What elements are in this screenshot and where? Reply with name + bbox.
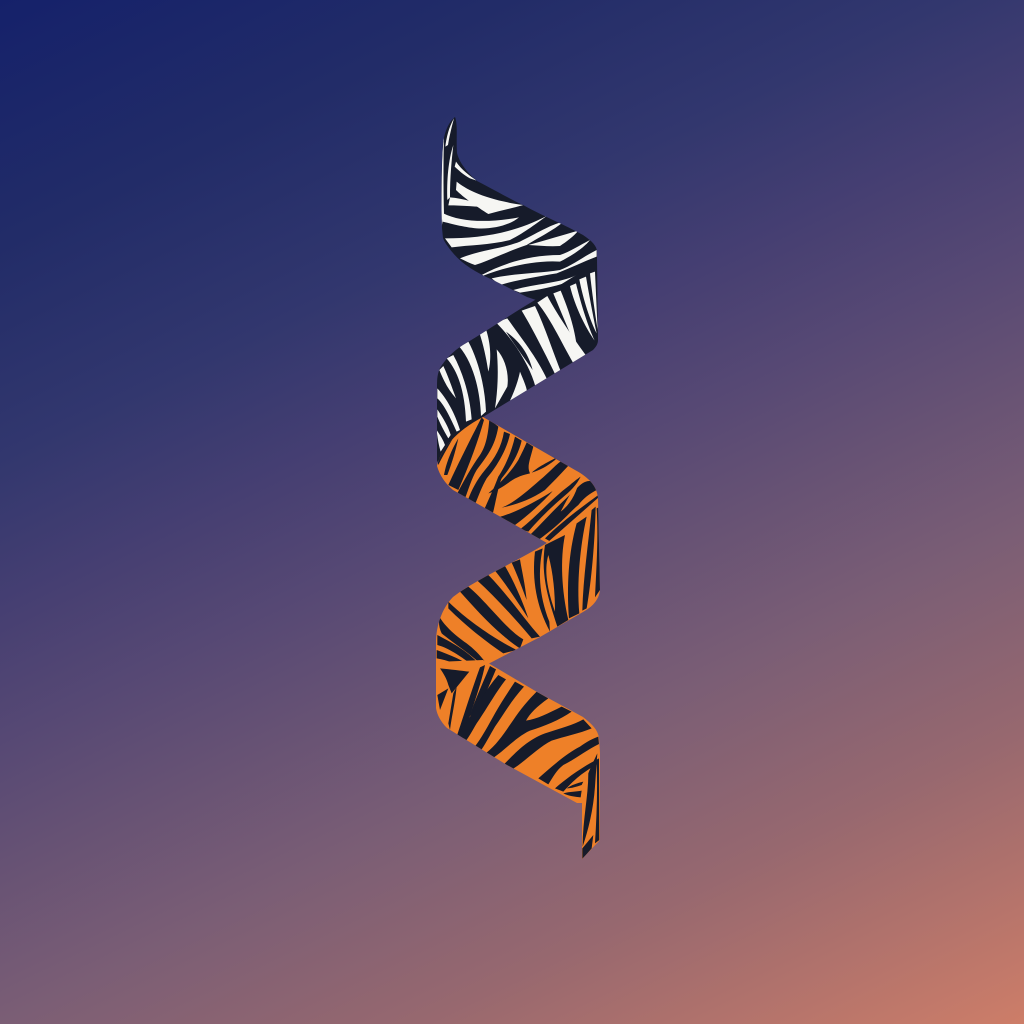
ribbon segment: tiger upper front band [437,417,598,543]
ribbon segment: tiger lower front band and tail [436,660,600,859]
ribbon [430,110,605,865]
ribbon segment: zebra back band [437,262,598,462]
ribbon segment: tiger lower back band [436,498,600,664]
ribbon segment: zebra front band [441,117,597,300]
